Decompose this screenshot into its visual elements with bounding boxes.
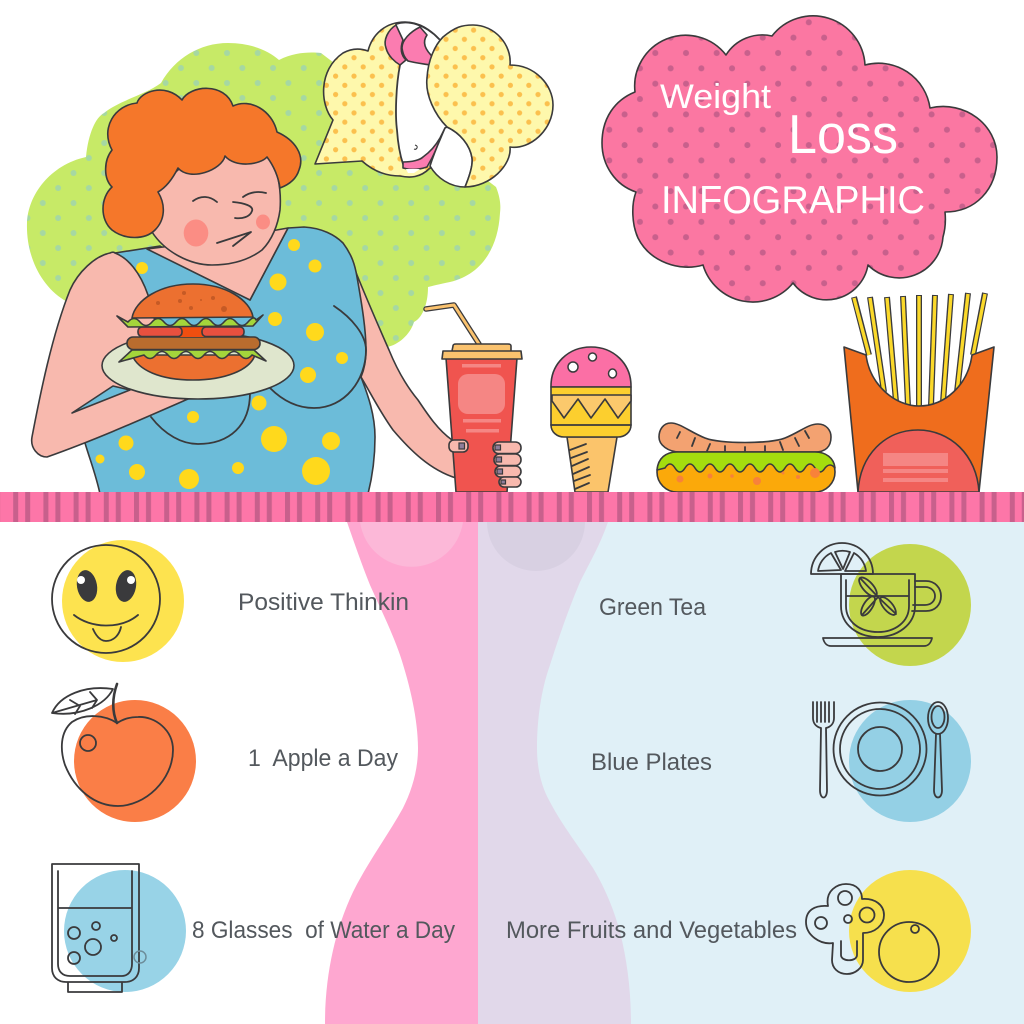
right arm <box>355 270 456 478</box>
panel: lower left white background <box>0 522 478 1024</box>
ice cream <box>551 347 631 492</box>
straw <box>426 305 479 344</box>
thought bubble with slim body <box>315 22 553 187</box>
item: apple <box>52 684 398 822</box>
item: blue plates <box>591 700 971 822</box>
green dotted cloud behind woman <box>27 43 500 347</box>
plate <box>102 332 294 399</box>
fingernails <box>459 443 506 484</box>
mustard <box>657 452 835 472</box>
bun <box>657 452 835 492</box>
bust lines <box>151 306 366 444</box>
chest skin <box>147 228 288 300</box>
icon: tea cup with lemon <box>811 543 971 666</box>
woman <box>32 88 456 494</box>
striped counter bar <box>0 492 1024 522</box>
bikini bottom <box>403 128 453 169</box>
title text: INFOGRAPHIC <box>661 179 925 222</box>
patty <box>127 337 260 350</box>
bikini top <box>385 25 434 65</box>
icon: glass of water <box>52 864 186 992</box>
bottom bun <box>132 355 255 380</box>
icon: smiley <box>52 540 184 662</box>
body silhouette: pink left half <box>325 522 478 1024</box>
title cloud <box>602 16 997 302</box>
fries box <box>844 347 994 492</box>
title text: Loss <box>788 103 898 165</box>
hair <box>103 88 301 238</box>
wafer band <box>551 387 631 437</box>
label: Green Tea <box>599 594 707 621</box>
left arm <box>32 252 188 457</box>
icon: broccoli and orange <box>806 870 971 992</box>
cup label <box>458 364 505 432</box>
face <box>152 150 280 265</box>
hot dog <box>657 423 835 492</box>
label: More Fruits and Vegetables <box>506 917 797 944</box>
eyes nose mouth <box>193 192 266 246</box>
fries sticks <box>854 293 985 407</box>
slim body figure <box>396 60 450 168</box>
title text: Weight <box>660 78 772 116</box>
fingers <box>449 440 521 487</box>
cup body <box>446 358 517 492</box>
hip <box>430 127 472 187</box>
label: Blue Plates <box>591 749 712 776</box>
panel: lower right blue background <box>478 522 1024 1024</box>
dress polka dots <box>96 239 348 489</box>
decorative circle on lavender half <box>487 522 585 571</box>
hamburger <box>117 284 266 380</box>
icon: apple <box>52 684 196 822</box>
top bun <box>132 284 253 318</box>
arm crease <box>72 386 130 413</box>
dress <box>85 227 375 494</box>
label: 1 Apple a Day <box>248 745 398 772</box>
tomato <box>138 327 244 337</box>
title text <box>660 78 925 222</box>
lower lettuce <box>119 350 266 362</box>
french fries <box>844 293 994 492</box>
soda cup with hand <box>426 305 522 492</box>
item: green tea <box>599 543 971 666</box>
body silhouette: lavender right half <box>478 522 631 1024</box>
upper lettuce <box>117 315 263 327</box>
cup lid <box>442 344 522 359</box>
box emblem <box>858 430 979 492</box>
right cloud lobe <box>427 25 553 187</box>
item: water <box>52 864 455 992</box>
decorative circle on pink half <box>360 522 463 567</box>
label: 8 Glasses of Water a Day <box>192 917 455 944</box>
label: Positive Thinkin <box>238 589 409 616</box>
cheeks <box>184 214 270 246</box>
item: positive thinking <box>52 540 409 662</box>
sausage <box>659 423 831 452</box>
white top of figure <box>396 23 440 65</box>
cone <box>567 437 617 492</box>
icon: plate fork spoon <box>813 700 971 822</box>
item: fruits and vegetables <box>506 870 971 992</box>
pink scoop <box>551 347 631 387</box>
